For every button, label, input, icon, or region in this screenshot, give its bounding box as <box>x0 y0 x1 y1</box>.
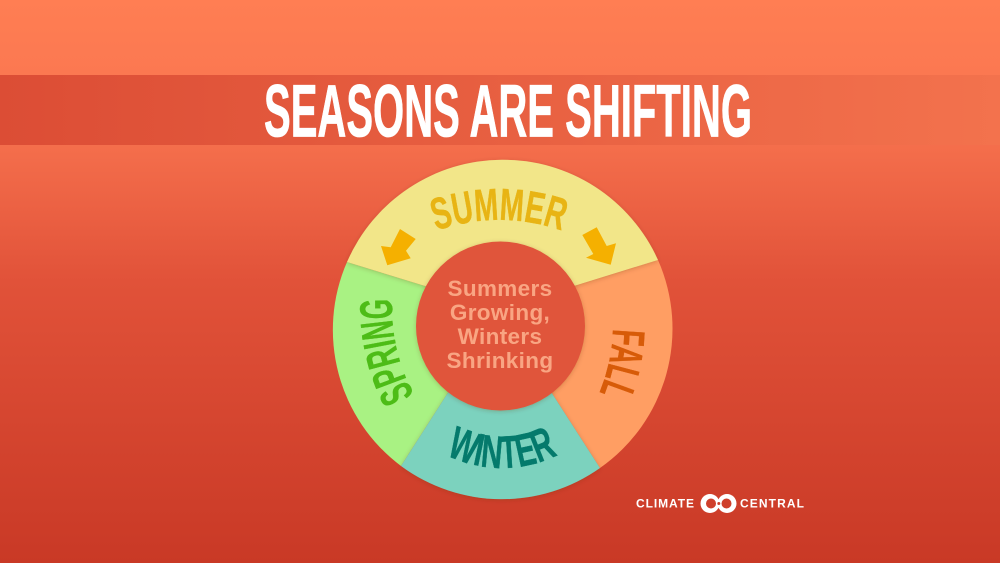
segment: spring <box>333 262 500 466</box>
season wheel <box>332 159 672 502</box>
label: spring: SPRING <box>360 300 412 406</box>
segment: summer <box>347 160 658 309</box>
centre text: Shrinking <box>447 348 553 373</box>
logo: Climate Central <box>636 494 804 513</box>
label: fall: FALL <box>600 330 645 394</box>
label: winter: WINTER <box>450 426 558 468</box>
centre text: Growing, <box>450 300 550 325</box>
arrow: right <box>582 227 616 265</box>
centre text: Summers <box>448 276 552 301</box>
segment: winter <box>401 327 600 499</box>
title band <box>0 75 1000 145</box>
centre circle <box>416 242 585 410</box>
label: summer: SUMMER <box>430 188 568 230</box>
icon: linked rings <box>700 494 736 513</box>
segment: fall <box>500 260 673 468</box>
centre text: Winters <box>458 324 542 349</box>
logo: Climate Central: CLIMATE <box>636 496 694 510</box>
arrow: left <box>381 229 416 265</box>
centre text <box>447 276 553 373</box>
logo: Climate Central: CENTRAL <box>740 496 804 510</box>
